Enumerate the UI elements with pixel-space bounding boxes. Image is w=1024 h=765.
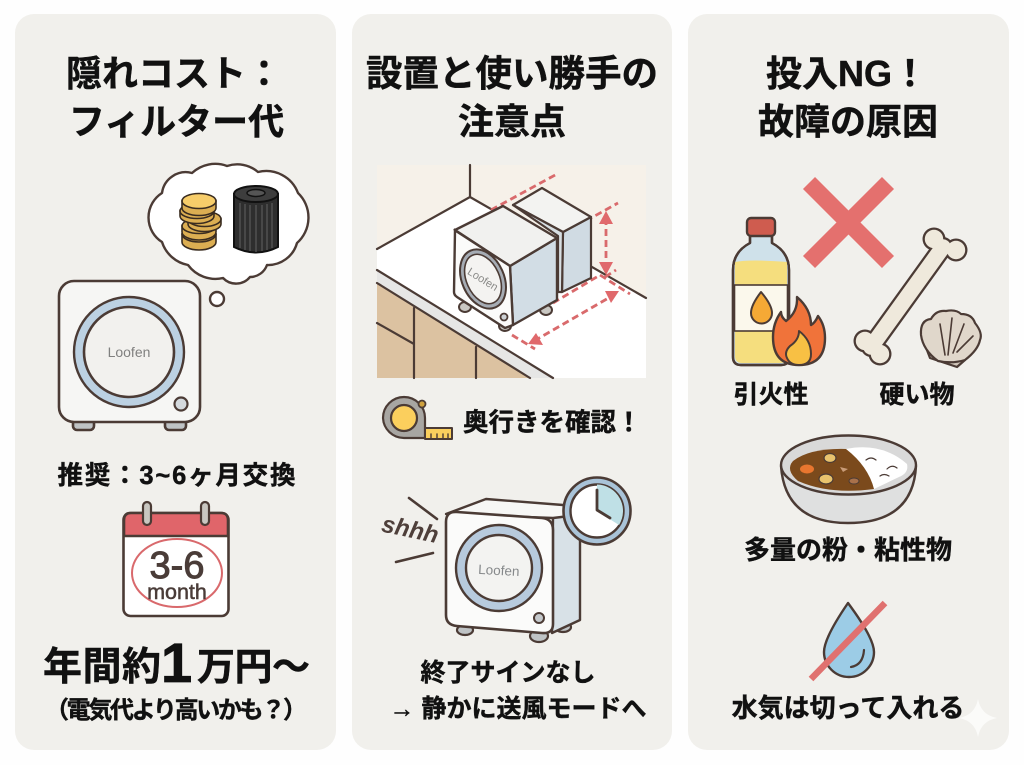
- panel: hidden filter cost: [15, 14, 336, 750]
- icon: quiet machine with clock: shhh: [379, 511, 441, 549]
- text: no finish signal: → 静かに送風モードへ: [390, 695, 646, 723]
- icon: quiet machine with clock: [379, 478, 630, 642]
- icon: calendar 3-6 month: [124, 502, 228, 616]
- text: flammable: 引火性: [733, 381, 809, 409]
- panel: installation and usability: [352, 14, 672, 750]
- icon: calendar 3-6 month: 3-6: [150, 545, 204, 587]
- icon: bone and shell: [854, 228, 981, 367]
- icon: Loofen machine front: [59, 281, 200, 430]
- text: yearly cost: 1: [161, 631, 192, 694]
- text: yearly cost: 年間約: [43, 646, 161, 689]
- heading: installation notes: 注意点: [458, 101, 566, 142]
- heading: hidden cost: フィルター代: [69, 101, 284, 142]
- icon: red cross: [809, 183, 888, 262]
- icon: tape measure: [383, 397, 452, 439]
- icon: calendar 3-6 month: month: [147, 580, 207, 604]
- heading: do not insert: [758, 53, 938, 142]
- heading: hidden cost: [66, 53, 284, 142]
- icon: sparkle: [959, 699, 997, 737]
- heading: hidden cost: 隠れコスト：: [66, 53, 282, 94]
- icon: thought bubble with coins and filter: [149, 164, 308, 306]
- icon: Loofen machine front: Loofen: [108, 344, 150, 360]
- panel: do not insert: [688, 14, 1009, 750]
- text: hard objects: 硬い物: [879, 381, 955, 409]
- heading: installation notes: [366, 53, 658, 142]
- text: no finish signal: [390, 659, 646, 723]
- icon: quiet machine with clock: Loofen: [478, 562, 520, 579]
- illustration: depth check on counter: [377, 165, 646, 378]
- text: remove moisture: 水気は切って入れる: [732, 693, 964, 723]
- text: large amounts of powder and sticky matter: 多量の粉・粘性物: [744, 535, 952, 565]
- text: yearly cost: [43, 631, 310, 694]
- illustration: depth check on counter: Loofen: [465, 266, 500, 294]
- heading: do not insert: 故障の原因: [758, 101, 938, 142]
- text: yearly cost: 万円～: [197, 647, 310, 689]
- icon: water drop crossed out: [811, 603, 885, 679]
- text: recommended replacement interval: 推奨：3~6ヶ月交換: [58, 462, 296, 490]
- icon: curry rice bowl: [781, 436, 916, 523]
- heading: installation notes: 設置と使い勝手の: [366, 53, 658, 94]
- text: possibly higher than electricity: （電気代より高いかも？）: [45, 697, 307, 724]
- heading: do not insert: 投入NG！: [766, 53, 928, 94]
- text: check depth: 奥行きを確認！: [463, 409, 642, 437]
- icon: oil bottle with flame: [733, 218, 825, 365]
- text: no finish signal: 終了サインなし: [420, 659, 596, 687]
